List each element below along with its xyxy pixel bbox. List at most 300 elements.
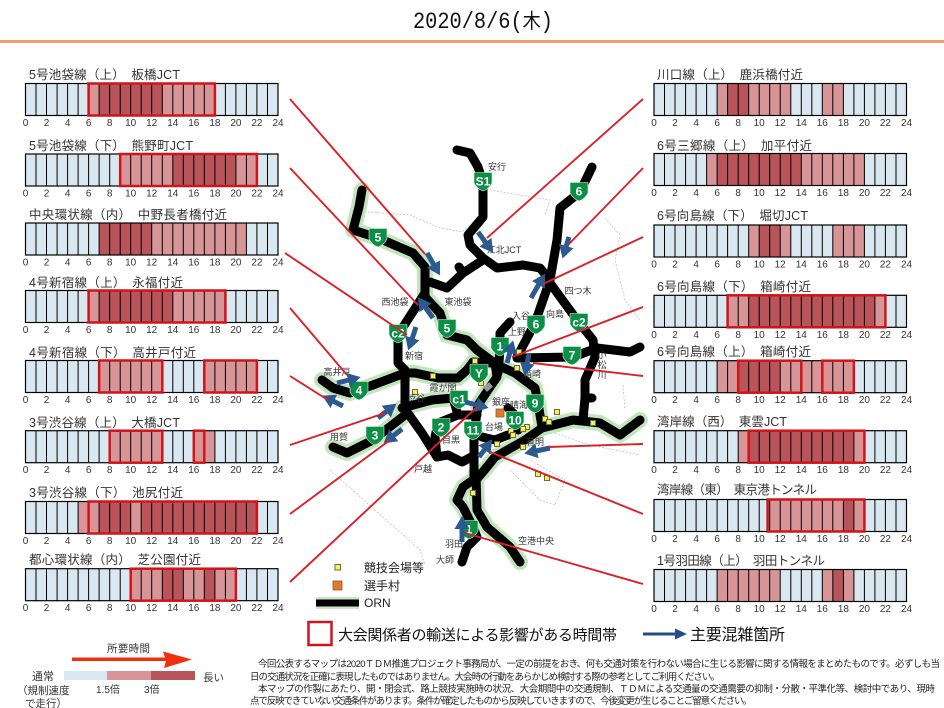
place names: 箱崎: [523, 368, 541, 379]
chart: 4号新宿線（下） 高井戸付近: 16: [188, 395, 200, 406]
place names: 安行: [488, 161, 506, 172]
chart: 湾岸線（東） 東京港トンネル: 湾岸線（東） 東京港トンネル: [657, 482, 817, 497]
chart: 3号渋谷線（上） 大橋JCT: 18: [209, 465, 221, 476]
chart: 川口線（上） 鹿浜橋付近: 4: [693, 118, 699, 129]
chart: 1号羽田線（上） 羽田トンネル: 16: [817, 604, 828, 615]
chart: 湾岸線（東） 東京港トンネル: [651, 482, 912, 545]
chart: 中央環状線（内） 中野長者橋付近: 18: [209, 258, 221, 268]
chart: 3号渋谷線（下） 池尻付近: 18: [209, 536, 221, 547]
red leader lines: [285, 99, 643, 584]
map legend: [316, 561, 424, 610]
chart: 6号三郷線（上） 加平付近: 8: [735, 188, 741, 199]
chart: 6号三郷線（上） 加平付近: 14: [796, 188, 807, 199]
chart: 都心環状線（内） 芝公園付近: 8: [107, 603, 113, 614]
chart: 湾岸線（東） 東京港トンネル: 24: [901, 534, 912, 545]
chart: 6号向島線（上） 箱崎付近: 20: [859, 395, 870, 406]
chart: 1号羽田線（上） 羽田トンネル: 1号羽田線（上） 羽田トンネル: [657, 553, 825, 568]
chart: 6号三郷線（上） 加平付近: 16: [817, 188, 828, 199]
chart: 湾岸線（西） 東雲JCT: 10: [754, 465, 765, 476]
travel time legend: [17, 642, 224, 708]
chart: 4号新宿線（上） 永福付近: 24: [272, 325, 284, 336]
place names: 川: [597, 370, 607, 380]
place names: 入谷: [512, 311, 530, 321]
chart: 5号池袋線（下） 熊野町JCT: 18: [209, 188, 221, 200]
chart: 1号羽田線（上） 羽田トンネル: 14: [796, 604, 807, 615]
chart: 6号三郷線（上） 加平付近: 4: [693, 188, 699, 199]
chart: 5号池袋線（上） 板橋JCT: 16: [188, 118, 200, 129]
chart: 5号池袋線（下） 熊野町JCT: 12: [146, 188, 158, 200]
key: main congestion arrow: 主要混雑箇所: [690, 626, 785, 644]
chart: 湾岸線（東） 東京港トンネル: 20: [859, 534, 870, 545]
chart: 湾岸線（東） 東京港トンネル: 12: [775, 534, 786, 545]
chart: 5号池袋線（上） 板橋JCT: 0: [23, 118, 29, 129]
chart: 6号向島線（下） 堀切JCT: 2: [672, 260, 678, 270]
chart: 6号向島線（上） 箱崎付近: 6号向島線（上） 箱崎付近: [657, 344, 811, 359]
chart: 都心環状線（内） 芝公園付近: 14: [167, 603, 179, 614]
chart: 湾岸線（東） 東京港トンネル: 22: [880, 534, 891, 545]
chart: 5号池袋線（下） 熊野町JCT: 8: [107, 188, 113, 200]
chart: 6号向島線（下） 箱崎付近: 12: [775, 330, 786, 341]
chart: 川口線（上） 鹿浜橋付近: [651, 67, 912, 129]
chart: 6号向島線（上） 箱崎付近: 14: [796, 395, 807, 406]
chart: 湾岸線（東） 東京港トンネル: 0: [651, 534, 657, 545]
chart: 中央環状線（内） 中野長者橋付近: 0: [23, 258, 29, 268]
footnote: 今回公表するマップは2020ＴＤＭ推進プロジェクト事務局が、一定の前提をおき、何も交通対策を行わない場合に生じる影響に関する情報をまとめたものです。必ずしも当: [258, 658, 940, 670]
key: Olympic transport impact box: 大会関係者の輸送による影響がある時間帯: [338, 627, 617, 644]
chart: 5号池袋線（上） 板橋JCT: 5号池袋線（上） 板橋JCT: [29, 67, 180, 82]
chart: 中央環状線（内） 中野長者橋付近: 8: [107, 258, 113, 268]
route shields: 1: [497, 340, 504, 354]
chart: 4号新宿線（上） 永福付近: 2: [44, 325, 50, 336]
route shields: S1: [476, 174, 491, 188]
chart: 6号向島線（上） 箱崎付近: [651, 344, 912, 406]
chart: 湾岸線（西） 東雲JCT: 24: [901, 465, 912, 476]
chart: 4号新宿線（下） 高井戸付近: [23, 345, 284, 406]
chart: 6号向島線（上） 箱崎付近: 8: [735, 395, 741, 406]
chart: 5号池袋線（上） 板橋JCT: 8: [107, 118, 113, 129]
place names: 江北JCT: [487, 245, 522, 255]
place names: 晴海: [510, 399, 528, 410]
key: main congestion arrow: [643, 626, 785, 644]
place names: 大師: [436, 554, 454, 565]
chart: 4号新宿線（下） 高井戸付近: 8: [107, 395, 113, 406]
chart: 6号向島線（下） 箱崎付近: 6: [714, 330, 720, 341]
footnote: 本マップの作製にあたり、開・閉会式、路上競技実施時の状況、大会期間中の交通規制、ＴＤＭによる交通量の交通需要の抑制・分散・平準化等、検討中であり、現時: [258, 683, 935, 695]
chart: 5号池袋線（下） 熊野町JCT: 5号池袋線（下） 熊野町JCT: [29, 138, 193, 153]
chart: 6号向島線（上） 箱崎付近: 12: [775, 395, 786, 406]
chart: 5号池袋線（上） 板橋JCT: 24: [272, 118, 284, 129]
chart: 3号渋谷線（上） 大橋JCT: 3号渋谷線（上） 大橋JCT: [29, 415, 180, 430]
chart: 湾岸線（西） 東雲JCT: 6: [714, 465, 720, 476]
chart: 4号新宿線（下） 高井戸付近: 10: [125, 395, 137, 406]
chart: 5号池袋線（上） 板橋JCT: 18: [209, 118, 221, 129]
title: 2020/8/6( 木): [413, 9, 553, 36]
chart: 5号池袋線（上） 板橋JCT: 4: [65, 118, 71, 129]
athletes village marker: [496, 409, 504, 417]
route shields: 7: [569, 348, 576, 362]
chart: 湾岸線（東） 東京港トンネル: 16: [817, 534, 828, 545]
chart: 湾岸線（西） 東雲JCT: 20: [859, 465, 870, 476]
chart: 3号渋谷線（上） 大橋JCT: [23, 415, 284, 476]
road patch: [483, 382, 493, 392]
chart: 湾岸線（西） 東雲JCT: 12: [775, 465, 786, 476]
chart: 6号向島線（上） 箱崎付近: 2: [672, 395, 678, 406]
map: [322, 150, 640, 565]
chart: 中央環状線（内） 中野長者橋付近: 10: [125, 258, 137, 268]
place names: 東池袋: [444, 296, 472, 307]
chart: 湾岸線（東） 東京港トンネル: 6: [714, 534, 720, 545]
chart: 6号三郷線（上） 加平付近: 0: [651, 188, 657, 199]
congestion arrows: [333, 232, 569, 542]
black expressway network: [322, 150, 640, 562]
chart: 4号新宿線（上） 永福付近: 8: [107, 325, 113, 336]
chart: 3号渋谷線（下） 池尻付近: 2: [44, 536, 50, 547]
chart: 6号向島線（下） 堀切JCT: 14: [796, 260, 807, 270]
chart: 3号渋谷線（上） 大橋JCT: 2: [44, 465, 50, 476]
chart: 6号三郷線（上） 加平付近: 22: [880, 188, 891, 199]
chart: 6号向島線（下） 堀切JCT: 6号向島線（下） 堀切JCT: [657, 208, 808, 223]
chart: 3号渋谷線（下） 池尻付近: 3号渋谷線（下） 池尻付近: [29, 485, 183, 500]
chart: 6号向島線（上） 箱崎付近: 18: [838, 395, 849, 406]
place names: 四つ木: [564, 285, 592, 296]
chart: 6号三郷線（上） 加平付近: 24: [901, 188, 912, 199]
chart: 3号渋谷線（上） 大橋JCT: 16: [188, 465, 200, 476]
chart: 6号向島線（下） 堀切JCT: 0: [651, 260, 657, 270]
chart: 4号新宿線（下） 高井戸付近: 0: [23, 395, 29, 406]
chart: 川口線（上） 鹿浜橋付近: 14: [796, 118, 807, 129]
chart: 6号向島線（下） 堀切JCT: 24: [901, 260, 912, 270]
chart: 4号新宿線（上） 永福付近: 18: [209, 325, 221, 336]
chart: 6号三郷線（上） 加平付近: 6: [714, 188, 720, 199]
chart: 6号向島線（下） 箱崎付近: 18: [838, 330, 849, 341]
chart: 5号池袋線（下） 熊野町JCT: 2: [44, 188, 50, 200]
route shields: 1: [466, 522, 473, 536]
chart: 4号新宿線（上） 永福付近: [23, 275, 284, 336]
footnote: 日の交通状況を正確に表現したものではありません。大会時の行動をあらかじめ検討する際の参考としてご利用ください。: [250, 671, 720, 683]
chart: 川口線（上） 鹿浜橋付近: 22: [880, 118, 891, 129]
chart: 6号向島線（下） 箱崎付近: 22: [880, 330, 891, 341]
header rule: [0, 40, 944, 43]
chart: 4号新宿線（上） 永福付近: 6: [86, 325, 92, 336]
chart: 湾岸線（西） 東雲JCT: 0: [651, 465, 657, 476]
place names: 新宿: [405, 350, 423, 361]
chart: 6号向島線（下） 堀切JCT: 6: [714, 260, 720, 270]
chart: 6号向島線（下） 堀切JCT: 10: [754, 260, 765, 270]
place names: 高井戸: [323, 366, 351, 377]
chart: 1号羽田線（上） 羽田トンネル: [651, 553, 912, 615]
chart: 6号三郷線（上） 加平付近: 18: [838, 188, 849, 199]
place names: 目黒: [442, 435, 460, 445]
chart: 5号池袋線（下） 熊野町JCT: 6: [86, 188, 92, 200]
chart: 3号渋谷線（下） 池尻付近: 4: [65, 536, 71, 547]
route shields: c2: [572, 316, 586, 330]
chart: 4号新宿線（下） 高井戸付近: 20: [230, 395, 242, 406]
chart: 都心環状線（内） 芝公園付近: [23, 552, 284, 614]
travel time legend: 通常: [32, 670, 54, 683]
chart: 3号渋谷線（上） 大橋JCT: 20: [230, 465, 242, 476]
chart: 1号羽田線（上） 羽田トンネル: 6: [714, 604, 720, 615]
chart: 3号渋谷線（上） 大橋JCT: 8: [107, 465, 113, 476]
chart: 6号向島線（下） 堀切JCT: 20: [859, 260, 870, 270]
place names: [323, 161, 607, 565]
chart: 1号羽田線（上） 羽田トンネル: 8: [735, 604, 741, 615]
chart: 湾岸線（東） 東京港トンネル: 18: [838, 534, 849, 545]
chart: 3号渋谷線（上） 大橋JCT: 6: [86, 465, 92, 476]
chart: 川口線（上） 鹿浜橋付近: 16: [817, 118, 828, 129]
map legend: ORN: [364, 596, 391, 610]
travel time legend: 長い: [203, 672, 224, 684]
place names: 台場: [485, 421, 503, 432]
map legend: 競技会場等: [364, 561, 424, 575]
route shields: 4: [356, 384, 363, 398]
chart: 1号羽田線（上） 羽田トンネル: 10: [754, 604, 765, 615]
chart: 3号渋谷線（下） 池尻付近: 20: [230, 536, 242, 547]
chart: 中央環状線（内） 中野長者橋付近: 14: [167, 258, 179, 268]
chart: 中央環状線（内） 中野長者橋付近: 中央環状線（内） 中野長者橋付近: [29, 207, 227, 222]
route shields: c1: [452, 392, 466, 406]
chart: 3号渋谷線（下） 池尻付近: 16: [188, 536, 200, 547]
chart: 湾岸線（西） 東雲JCT: 14: [796, 465, 807, 476]
chart: 6号三郷線（上） 加平付近: 6号三郷線（上） 加平付近: [657, 138, 812, 153]
chart: 6号三郷線（上） 加平付近: 2: [672, 188, 678, 199]
chart: 3号渋谷線（上） 大橋JCT: 0: [23, 465, 29, 476]
travel time legend: 3倍: [144, 684, 160, 696]
chart: 6号向島線（下） 箱崎付近: 4: [693, 330, 699, 341]
place names: 羽田: [445, 539, 463, 549]
chart: 湾岸線（西） 東雲JCT: 2: [672, 465, 678, 476]
chart: 6号向島線（下） 堀切JCT: 16: [817, 260, 828, 270]
chart: 6号三郷線（上） 加平付近: 12: [775, 188, 786, 199]
chart: 6号向島線（上） 箱崎付近: 16: [817, 395, 828, 406]
chart: 3号渋谷線（下） 池尻付近: [23, 485, 284, 547]
place names: 小: [597, 350, 607, 360]
chart: 3号渋谷線（下） 池尻付近: 6: [86, 536, 92, 547]
chart: 6号向島線（下） 箱崎付近: 8: [735, 330, 741, 341]
chart: 6号三郷線（上） 加平付近: 10: [754, 188, 765, 199]
route shields: 11: [467, 424, 480, 438]
route shields: 9: [532, 396, 539, 410]
chart: 川口線（上） 鹿浜橋付近: 12: [775, 118, 786, 129]
route shields: Y: [475, 366, 483, 380]
chart: 湾岸線（西） 東雲JCT: 4: [693, 465, 699, 476]
venue markers: [412, 350, 596, 496]
chart: 中央環状線（内） 中野長者橋付近: [23, 207, 284, 268]
place names: 西池袋: [381, 296, 409, 307]
chart: 5号池袋線（下） 熊野町JCT: 24: [272, 188, 284, 200]
chart: 6号向島線（下） 堀切JCT: 8: [735, 260, 741, 270]
chart: 5号池袋線（上） 板橋JCT: 2: [44, 118, 50, 129]
chart: 川口線（上） 鹿浜橋付近: 6: [714, 118, 720, 129]
place names: 用賀: [330, 431, 348, 442]
chart: 川口線（上） 鹿浜橋付近: 20: [859, 118, 870, 129]
chart: 4号新宿線（下） 高井戸付近: 6: [86, 395, 92, 406]
chart: 湾岸線（西） 東雲JCT: [651, 414, 912, 476]
chart: 湾岸線（西） 東雲JCT: 湾岸線（西） 東雲JCT: [657, 414, 787, 429]
chart: 6号向島線（上） 箱崎付近: 4: [693, 395, 699, 406]
chart: 5号池袋線（下） 熊野町JCT: [23, 138, 284, 200]
chart: 6号向島線（上） 箱崎付近: 0: [651, 395, 657, 406]
chart: 3号渋谷線（上） 大橋JCT: 4: [65, 465, 71, 476]
chart: 中央環状線（内） 中野長者橋付近: 24: [272, 258, 284, 268]
chart: 5号池袋線（下） 熊野町JCT: 14: [167, 188, 179, 200]
route shields: 6: [576, 184, 583, 198]
chart: 5号池袋線（下） 熊野町JCT: 0: [23, 188, 29, 200]
chart: 6号向島線（下） 堀切JCT: 18: [838, 260, 849, 270]
chart: 3号渋谷線（上） 大橋JCT: 22: [251, 465, 263, 476]
footnote: 点で反映できていない交通条件があります。条件が確定したものから反映していきますので、今後変更が生じることご留意ください。: [250, 695, 752, 707]
route shields: 6: [533, 318, 540, 332]
chart: 1号羽田線（上） 羽田トンネル: 18: [838, 604, 849, 615]
place names: 松: [597, 359, 607, 370]
chart: 湾岸線（東） 東京港トンネル: 2: [672, 534, 678, 545]
chart: 5号池袋線（上） 板橋JCT: 10: [125, 118, 137, 129]
chart: 1号羽田線（上） 羽田トンネル: 4: [693, 604, 699, 615]
chart: 川口線（上） 鹿浜橋付近: 川口線（上） 鹿浜橋付近: [657, 67, 803, 82]
chart: 5号池袋線（上） 板橋JCT: 14: [167, 118, 179, 129]
chart: 3号渋谷線（下） 池尻付近: 0: [23, 536, 29, 547]
chart: 1号羽田線（上） 羽田トンネル: 12: [775, 604, 786, 615]
chart: 都心環状線（内） 芝公園付近: 16: [188, 603, 200, 614]
chart: 都心環状線（内） 芝公園付近: 18: [209, 603, 221, 614]
chart: 4号新宿線（上） 永福付近: 16: [188, 325, 200, 336]
chart: 湾岸線（西） 東雲JCT: 22: [880, 465, 891, 476]
chart: 3号渋谷線（上） 大橋JCT: 14: [167, 465, 179, 476]
chart: 4号新宿線（下） 高井戸付近: 18: [209, 395, 221, 406]
chart: 都心環状線（内） 芝公園付近: 6: [86, 603, 92, 614]
chart: 6号向島線（下） 箱崎付近: 14: [796, 330, 807, 341]
chart: 1号羽田線（上） 羽田トンネル: 2: [672, 604, 678, 615]
chart: 6号向島線（下） 箱崎付近: 16: [817, 330, 828, 341]
chart: 湾岸線（東） 東京港トンネル: 8: [735, 534, 741, 545]
chart: 川口線（上） 鹿浜橋付近: 24: [901, 118, 912, 129]
chart: 4号新宿線（上） 永福付近: 4: [65, 325, 71, 336]
chart: 1号羽田線（上） 羽田トンネル: 24: [901, 604, 912, 615]
place names: 銀座: [492, 396, 510, 407]
chart: 6号三郷線（上） 加平付近: 20: [859, 188, 870, 199]
chart: 中央環状線（内） 中野長者橋付近: 4: [65, 258, 71, 268]
chart: 都心環状線（内） 芝公園付近: 2: [44, 603, 50, 614]
chart: 6号向島線（上） 箱崎付近: 24: [901, 395, 912, 406]
chart: 湾岸線（東） 東京港トンネル: 4: [693, 534, 699, 545]
chart: 川口線（上） 鹿浜橋付近: 0: [651, 118, 657, 129]
chart: 都心環状線（内） 芝公園付近: 12: [146, 603, 158, 614]
chart: 中央環状線（内） 中野長者橋付近: 22: [251, 258, 263, 268]
chart: 6号向島線（下） 箱崎付近: 2: [672, 330, 678, 341]
chart: 都心環状線（内） 芝公園付近: 4: [65, 603, 71, 614]
chart: 5号池袋線（上） 板橋JCT: [23, 67, 284, 129]
route shields: 5: [444, 322, 451, 336]
faint boundary lines: [330, 190, 640, 565]
travel time legend: 1.5倍: [96, 684, 120, 696]
route shields: [350, 172, 588, 539]
chart: 5号池袋線（下） 熊野町JCT: 20: [230, 188, 242, 200]
chart: 4号新宿線（上） 永福付近: 0: [23, 325, 29, 336]
chart: 3号渋谷線（下） 池尻付近: 24: [272, 536, 284, 547]
route shields: 2: [438, 420, 445, 434]
place names: 霞が関: [429, 382, 457, 393]
chart: 都心環状線（内） 芝公園付近: 24: [272, 603, 284, 614]
route shields: 5: [375, 230, 382, 244]
chart: 都心環状線（内） 芝公園付近: 0: [23, 603, 29, 614]
chart: 5号池袋線（上） 板橋JCT: 12: [146, 118, 158, 129]
chart: 1号羽田線（上） 羽田トンネル: 20: [859, 604, 870, 615]
chart: 6号向島線（下） 箱崎付近: [651, 279, 912, 341]
route shields: c2: [391, 326, 405, 340]
travel time legend: 所要時間: [107, 642, 150, 655]
chart: 3号渋谷線（上） 大橋JCT: 12: [146, 465, 158, 476]
chart: 4号新宿線（下） 高井戸付近: 4号新宿線（下） 高井戸付近: [29, 345, 196, 360]
chart: 5号池袋線（上） 板橋JCT: 20: [230, 118, 242, 129]
chart: 湾岸線（西） 東雲JCT: 8: [735, 465, 741, 476]
chart: 中央環状線（内） 中野長者橋付近: 16: [188, 258, 200, 268]
chart: 5号池袋線（下） 熊野町JCT: 10: [125, 188, 137, 200]
chart: 4号新宿線（下） 高井戸付近: 4: [65, 395, 71, 406]
chart: 5号池袋線（上） 板橋JCT: 22: [251, 118, 263, 129]
chart: 4号新宿線（上） 永福付近: 14: [167, 325, 179, 336]
chart: 中央環状線（内） 中野長者橋付近: 6: [86, 258, 92, 268]
chart: 3号渋谷線（下） 池尻付近: 8: [107, 536, 113, 547]
chart: 5号池袋線（下） 熊野町JCT: 22: [251, 188, 263, 200]
chart: 3号渋谷線（下） 池尻付近: 14: [167, 536, 179, 547]
chart: 6号向島線（上） 箱崎付近: 10: [754, 395, 765, 406]
chart: 中央環状線（内） 中野長者橋付近: 2: [44, 258, 50, 268]
route shields: 3: [372, 428, 379, 442]
place names: 有明: [526, 436, 544, 447]
chart: 川口線（上） 鹿浜橋付近: 10: [754, 118, 765, 129]
chart: 4号新宿線（上） 永福付近: 10: [125, 325, 137, 336]
chart: 4号新宿線（上） 永福付近: 12: [146, 325, 158, 336]
chart: 中央環状線（内） 中野長者橋付近: 12: [146, 258, 158, 268]
green ORN halo: [322, 190, 640, 562]
route shields: 10: [508, 414, 522, 428]
map legend: 選手村: [364, 579, 400, 593]
place names: 空港中央: [518, 535, 554, 546]
chart: 5号池袋線（上） 板橋JCT: 6: [86, 118, 92, 129]
chart: 6号向島線（下） 箱崎付近: 10: [754, 330, 765, 341]
chart: 6号向島線（上） 箱崎付近: 6: [714, 395, 720, 406]
chart: 1号羽田線（上） 羽田トンネル: 22: [880, 604, 891, 615]
chart: 6号向島線（下） 箱崎付近: 0: [651, 330, 657, 341]
chart: 3号渋谷線（上） 大橋JCT: 24: [272, 465, 284, 476]
chart: 3号渋谷線（上） 大橋JCT: 10: [125, 465, 137, 476]
chart: 5号池袋線（下） 熊野町JCT: 16: [188, 188, 200, 200]
chart: 湾岸線（東） 東京港トンネル: 10: [754, 534, 765, 545]
chart: 6号向島線（下） 堀切JCT: 4: [693, 260, 699, 270]
chart: 1号羽田線（上） 羽田トンネル: 0: [651, 604, 657, 615]
chart: 4号新宿線（下） 高井戸付近: 2: [44, 395, 50, 406]
chart: 6号三郷線（上） 加平付近: [651, 138, 912, 199]
chart: 4号新宿線（上） 永福付近: 20: [230, 325, 242, 336]
chart: 都心環状線（内） 芝公園付近: 都心環状線（内） 芝公園付近: [29, 552, 201, 567]
travel time legend: （規制速度: [17, 684, 70, 697]
chart: 湾岸線（西） 東雲JCT: 16: [817, 465, 828, 476]
chart: 川口線（上） 鹿浜橋付近: 18: [838, 118, 849, 129]
place names: 戸越: [414, 463, 432, 474]
chart: 川口線（上） 鹿浜橋付近: 8: [735, 118, 741, 129]
chart: 6号向島線（下） 箱崎付近: 6号向島線（下） 箱崎付近: [657, 279, 811, 294]
chart: 6号向島線（下） 堀切JCT: 22: [880, 260, 891, 270]
chart: 6号向島線（下） 箱崎付近: 24: [901, 330, 912, 341]
chart: 6号向島線（下） 箱崎付近: 20: [859, 330, 870, 341]
chart: 5号池袋線（下） 熊野町JCT: 4: [65, 188, 71, 200]
place names: 上野: [508, 327, 526, 337]
chart: 3号渋谷線（下） 池尻付近: 10: [125, 536, 137, 547]
chart: 川口線（上） 鹿浜橋付近: 2: [672, 118, 678, 129]
key: Olympic transport impact box: [308, 622, 617, 645]
chart: 6号向島線（下） 堀切JCT: 12: [775, 260, 786, 270]
chart: 湾岸線（西） 東雲JCT: 18: [838, 465, 849, 476]
chart: 都心環状線（内） 芝公園付近: 22: [251, 603, 263, 614]
